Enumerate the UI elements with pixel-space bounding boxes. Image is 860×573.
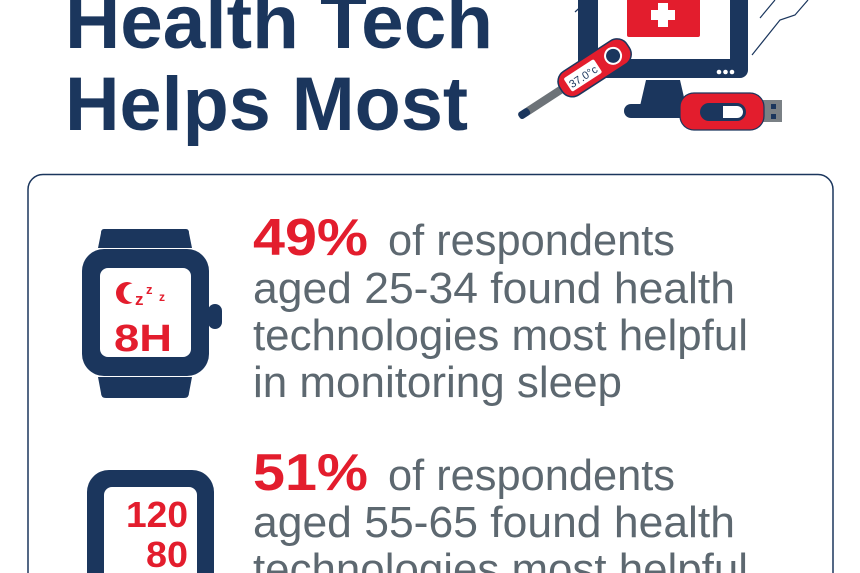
title: Helps Most (65, 62, 468, 147)
icon: smartwatch sleep: 8H (114, 318, 172, 360)
title (65, 0, 493, 147)
stat 1 text: in monitoring sleep (253, 358, 622, 407)
stat 2 text (253, 444, 748, 573)
stat 1 text (253, 209, 748, 407)
panel (28, 174, 833, 573)
stat 1 text: technologies most helpful (253, 311, 748, 360)
icon: computer with medical devices (512, 0, 808, 130)
icon: smartwatch sleep: z (146, 282, 153, 297)
stat 1 text: 49% (253, 209, 368, 267)
icon: smartwatch sleep: z (135, 290, 144, 309)
stat 2 text: of respondents (388, 451, 675, 500)
stat 1 text: aged 25-34 found health (253, 264, 735, 313)
icon: blood pressure monitor (87, 470, 214, 573)
stat 1 text: of respondents (388, 216, 675, 265)
icon: smartwatch sleep: z (159, 290, 165, 304)
icon: smartwatch sleep (82, 229, 222, 398)
icon: computer with medical devices: 37.0°c (567, 63, 600, 91)
icon: blood pressure monitor: 120 (126, 494, 188, 535)
stat 2 text: aged 55-65 found health (253, 498, 735, 547)
stat 2 text: 51% (253, 444, 368, 502)
